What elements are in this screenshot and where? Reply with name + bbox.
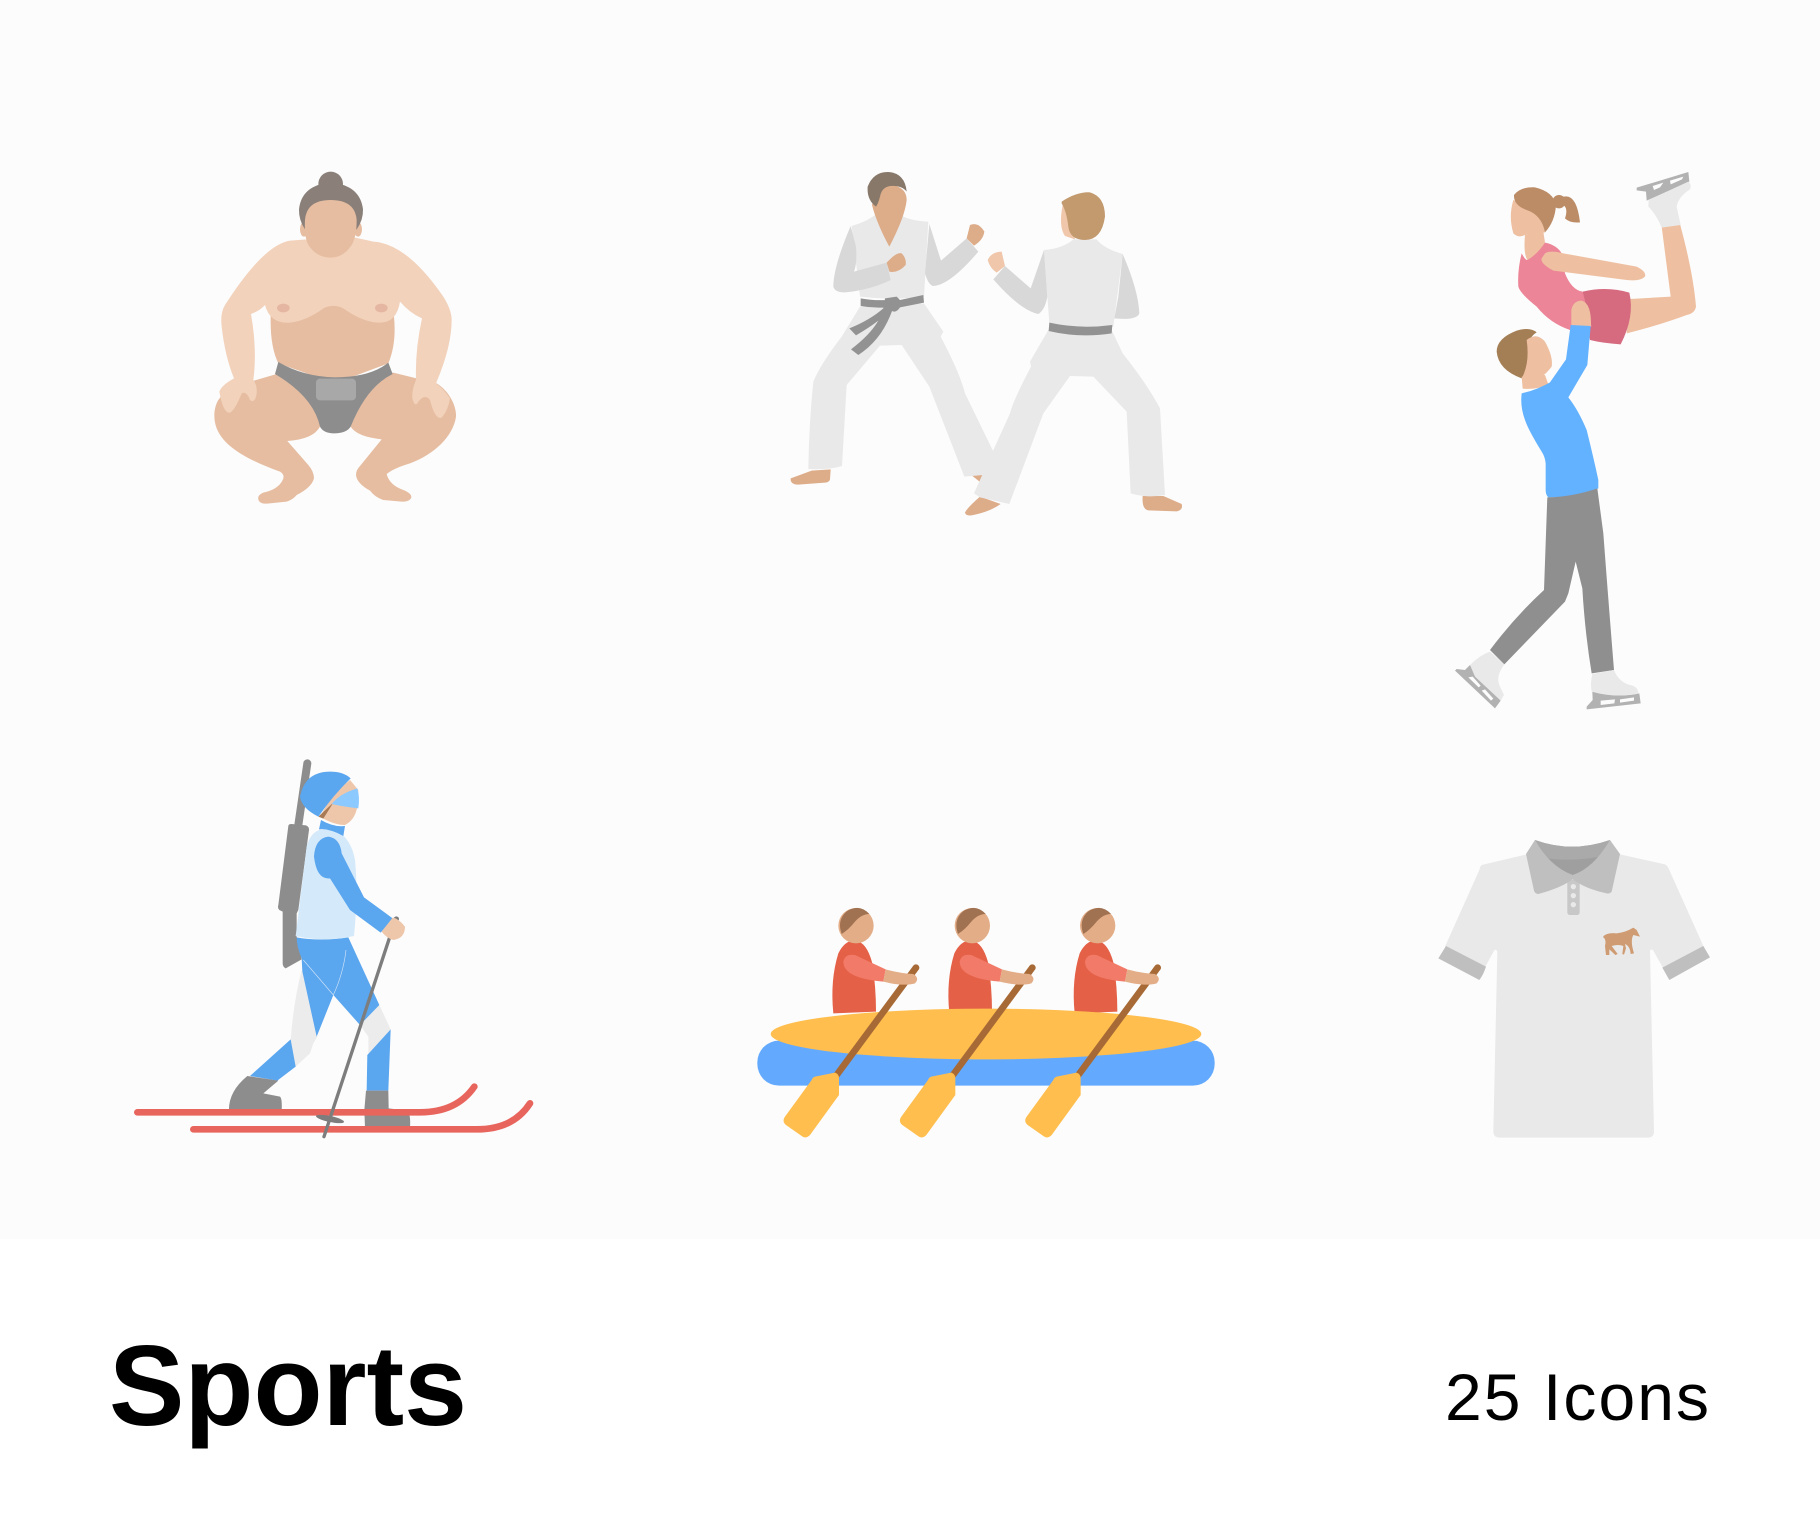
icon: rowing raft team bbox=[757, 908, 1215, 1137]
icon count label: 25 Icons bbox=[1445, 1360, 1709, 1434]
icon: karate fighters bbox=[791, 172, 1182, 515]
title: Sports bbox=[109, 1323, 467, 1450]
icon: sumo wrestler bbox=[214, 172, 456, 504]
icon: figure skating pair bbox=[1455, 172, 1696, 709]
icon: polo shirt bbox=[1438, 840, 1710, 1138]
icon: biathlon skier bbox=[137, 763, 530, 1137]
